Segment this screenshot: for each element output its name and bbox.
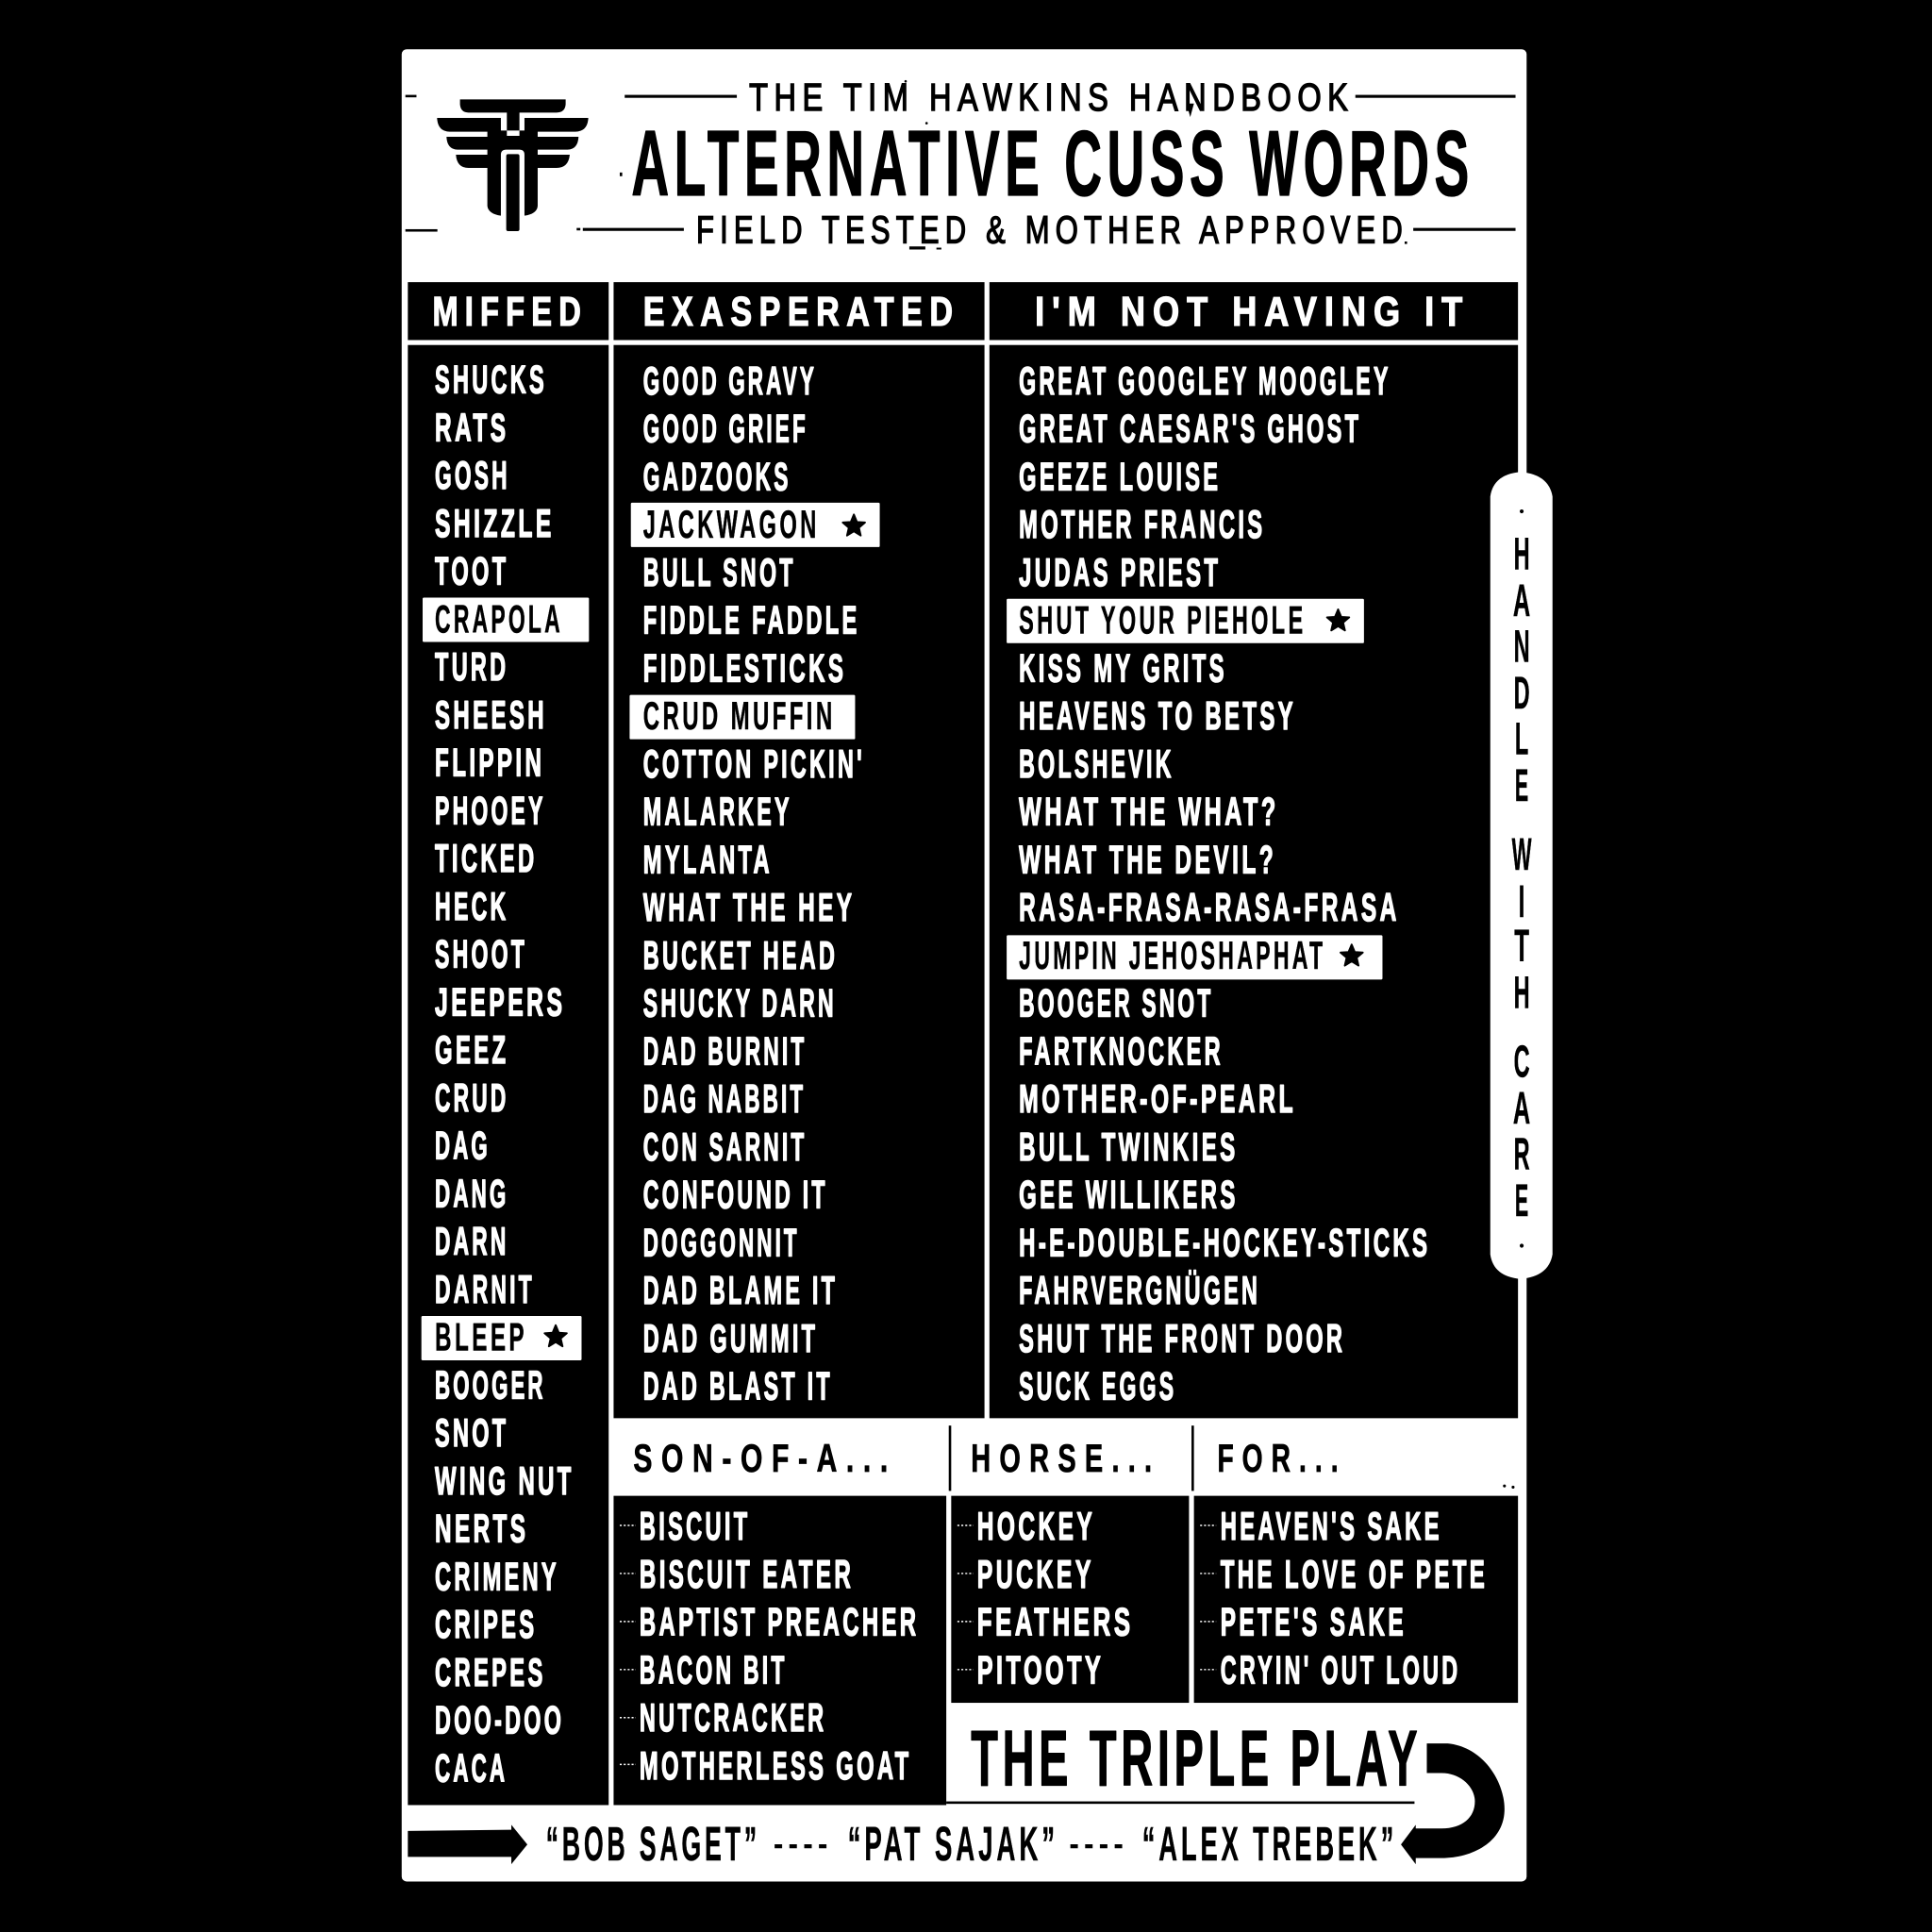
vertical stacked lettering: L bbox=[1515, 713, 1528, 764]
not having it words: BOOGER SNOT bbox=[1019, 981, 1214, 1025]
sub-headers row bbox=[633, 1425, 1347, 1491]
miffed words: SHOOT bbox=[435, 932, 527, 976]
divider between son-of-a and horse bbox=[949, 1425, 951, 1491]
vertical stacked lettering: I bbox=[1519, 876, 1524, 927]
triple play names bbox=[546, 1817, 1397, 1871]
miffed words: CRUD bbox=[435, 1075, 508, 1120]
not having it words: SHUT THE FRONT DOOR bbox=[1019, 1316, 1345, 1360]
horse words: HOCKEY bbox=[977, 1504, 1095, 1548]
exasperated words: DAD BLAME IT bbox=[643, 1268, 838, 1312]
not having it words: GREAT CAESAR'S GHOST bbox=[1019, 407, 1361, 451]
not having it words: GREAT GOOGLEY MOOGLEY bbox=[1019, 358, 1391, 403]
miffed words: SHEESH bbox=[435, 692, 547, 737]
top rule left bbox=[625, 95, 737, 98]
column headers bbox=[408, 282, 1518, 340]
sub-header: for: FOR... bbox=[1217, 1436, 1347, 1480]
highlight: shut your piehole with star bbox=[1007, 598, 1364, 643]
panel: for endings bbox=[1194, 1496, 1518, 1703]
highlight: crapola bbox=[423, 596, 589, 641]
white handbook card bbox=[402, 49, 1526, 1881]
horse words: FEATHERS bbox=[977, 1600, 1134, 1644]
exasperated words: GOOD GRAVY bbox=[643, 358, 817, 403]
name: Pat Sajak: “PAT SAJAK” bbox=[848, 1817, 1058, 1871]
horse words: PITOOTY bbox=[977, 1648, 1104, 1692]
exasperated words: FIDDLESTICKS bbox=[643, 645, 846, 690]
miffed words: SNOT bbox=[435, 1410, 508, 1455]
sub-header: son-of-a: SON-OF-A... bbox=[633, 1436, 897, 1480]
sub-header: horse: HORSE... bbox=[971, 1436, 1160, 1480]
miffed words: CRIPES bbox=[435, 1602, 537, 1646]
horse words bbox=[977, 1504, 1134, 1692]
vertical stacked lettering: A bbox=[1513, 575, 1530, 626]
son-of-a words: BAPTIST PREACHER bbox=[640, 1600, 919, 1644]
dotted leaders bbox=[958, 1525, 974, 1670]
dotted leaders bbox=[1200, 1525, 1216, 1670]
miffed words: CREPES bbox=[435, 1650, 546, 1694]
not having it words: RASA-FRASA-RASA-FRASA bbox=[1019, 885, 1400, 929]
vertical stacked lettering: H bbox=[1514, 528, 1530, 579]
vertical stacked lettering: N bbox=[1514, 621, 1530, 672]
for words bbox=[1221, 1504, 1488, 1692]
miffed words: TOOT bbox=[435, 548, 508, 592]
panel: I'm not having it list bbox=[990, 345, 1518, 1418]
exasperated words: BUCKET HEAD bbox=[643, 933, 838, 977]
miffed words: DARN bbox=[435, 1219, 508, 1263]
separator dashes: ---- bbox=[1070, 1828, 1128, 1861]
miffed words: TURD bbox=[435, 644, 508, 689]
panel: exasperated list bbox=[613, 345, 985, 1418]
miffed words: NERTS bbox=[435, 1507, 528, 1551]
panel: miffed list bbox=[408, 345, 608, 1805]
arrow: curved hook from triple play bbox=[1401, 1743, 1505, 1864]
header: exasperated bbox=[613, 282, 985, 340]
exasperated words: DAG NABBIT bbox=[643, 1076, 806, 1121]
not having it words: WHAT THE DEVIL? bbox=[1019, 837, 1276, 881]
not having it words bbox=[1019, 358, 1430, 1408]
miffed words: JEEPERS bbox=[435, 979, 566, 1024]
miffed words: CACA bbox=[435, 1745, 508, 1790]
dotted leaders bbox=[620, 1525, 636, 1764]
miffed words: DARNIT bbox=[435, 1267, 535, 1311]
son-of-a words: BISCUIT EATER bbox=[640, 1552, 854, 1596]
son-of-a words: BACON BIT bbox=[640, 1648, 788, 1692]
subtitle rule right bbox=[1413, 228, 1516, 231]
miffed words: RATS bbox=[435, 405, 508, 449]
header: I'm not having it: I'M NOT HAVING IT bbox=[1035, 290, 1470, 335]
vertical stacked lettering: D bbox=[1514, 668, 1530, 719]
highlight: jumpin jehoshaphat with star: JUMPIN JEHOSHAPHAT bbox=[1019, 933, 1325, 977]
miffed words: BOOGER bbox=[435, 1362, 546, 1407]
horse words: PUCKEY bbox=[977, 1552, 1094, 1596]
miffed words: DAG bbox=[435, 1124, 491, 1168]
vertical stacked lettering: C bbox=[1514, 1037, 1530, 1088]
rule under triple play bbox=[946, 1802, 1414, 1804]
not having it words: JUDAS PRIEST bbox=[1019, 550, 1221, 594]
miffed words: SHIZZLE bbox=[435, 501, 555, 545]
highlight: jumpin jehoshaphat with star bbox=[1007, 933, 1382, 979]
header: exasperated: EXASPERATED bbox=[643, 290, 959, 335]
not having it words: BULL TWINKIES bbox=[1019, 1124, 1239, 1169]
separator dashes: ---- bbox=[774, 1828, 833, 1861]
miffed words: WING NUT bbox=[435, 1458, 575, 1503]
son-of-a words bbox=[640, 1504, 919, 1788]
vertical stacked lettering: E bbox=[1515, 760, 1528, 811]
son-of-a words: MOTHERLESS GOAT bbox=[640, 1743, 912, 1788]
miffed words: PHOOEY bbox=[435, 788, 546, 832]
vertical stacked lettering bbox=[1512, 528, 1532, 1226]
for words: HEAVEN'S SAKE bbox=[1221, 1504, 1442, 1548]
highlight: jackwagon with star: JACKWAGON bbox=[643, 502, 820, 546]
not having it words: KISS MY GRITS bbox=[1019, 645, 1227, 690]
panel: horse endings bbox=[951, 1496, 1189, 1703]
exasperated words bbox=[643, 358, 865, 1408]
divider between horse and for bbox=[1191, 1425, 1194, 1491]
not having it words: H-E-DOUBLE-HOCKEY-STICKS bbox=[1019, 1220, 1430, 1264]
miffed words: TICKED bbox=[435, 836, 537, 880]
name: Bob Saget: “BOB SAGET” bbox=[546, 1817, 760, 1871]
not having it words: WHAT THE WHAT? bbox=[1019, 790, 1279, 834]
not having it words: SUCK EGGS bbox=[1019, 1364, 1176, 1408]
exasperated words: GADZOOKS bbox=[643, 454, 791, 498]
top rule right bbox=[1356, 95, 1516, 98]
top and bottom dots of the tab bbox=[1520, 509, 1524, 1248]
highlight: bleep with star: BLEEP bbox=[435, 1315, 527, 1359]
header: miffed: MIFFED bbox=[432, 290, 588, 335]
exasperated words: DOGGONNIT bbox=[643, 1220, 800, 1264]
side tab: handle with care bbox=[1491, 472, 1553, 1279]
not having it words: HEAVENS TO BETSY bbox=[1019, 693, 1296, 738]
for words: CRYIN' OUT LOUD bbox=[1221, 1648, 1460, 1692]
exasperated words: MALARKEY bbox=[643, 790, 792, 834]
exasperated words: GOOD GRIEF bbox=[643, 407, 808, 451]
masthead bbox=[406, 75, 1516, 1489]
vertical stacked lettering: E bbox=[1515, 1175, 1528, 1226]
not having it words: MOTHER FRANCIS bbox=[1019, 502, 1265, 546]
logo: Tim Hawkins winged TH mark bbox=[437, 99, 589, 231]
header: I'm not having it bbox=[990, 282, 1518, 340]
grunge specks bbox=[406, 80, 1514, 1489]
highlight: crud muffin: CRUD MUFFIN bbox=[643, 693, 836, 738]
miffed words: HECK bbox=[435, 884, 508, 928]
not having it words: BOLSHEVIK bbox=[1019, 741, 1174, 786]
exasperated words: SHUCKY DARN bbox=[643, 981, 837, 1025]
subtitle: field tested and mother approved: FIELD TESTED & MOTHER APPROVED bbox=[696, 208, 1408, 251]
highlight: crapola: CRAPOLA bbox=[435, 596, 563, 641]
not having it words: FAHRVERGNÜGEN bbox=[1019, 1268, 1260, 1312]
for words: THE LOVE OF PETE bbox=[1221, 1552, 1488, 1596]
exasperated words: WHAT THE HEY bbox=[643, 885, 855, 929]
exasperated words: DAD BURNIT bbox=[643, 1028, 808, 1073]
subtitle rule left bbox=[583, 228, 684, 231]
side tab: handle with care: W bbox=[1512, 829, 1532, 880]
miffed words: SHUCKS bbox=[435, 358, 547, 402]
highlight: crud muffin bbox=[629, 693, 855, 740]
vertical stacked lettering: T bbox=[1514, 921, 1529, 972]
not having it words: MOTHER-OF-PEARL bbox=[1019, 1076, 1296, 1121]
miffed words: CRIMENY bbox=[435, 1554, 559, 1598]
miffed words: DOO-DOO bbox=[435, 1698, 564, 1742]
vertical stacked lettering: H bbox=[1514, 967, 1530, 1018]
triple play heading: THE TRIPLE PLAY bbox=[971, 1714, 1422, 1803]
miffed words: DANG bbox=[435, 1171, 508, 1215]
miffed words: FLIPPIN bbox=[435, 741, 544, 785]
exasperated words: CONFOUND IT bbox=[643, 1173, 828, 1217]
arrow: right-pointing from left edge bbox=[408, 1824, 527, 1864]
not having it words: GEEZE LOUISE bbox=[1019, 454, 1221, 498]
kicker: the Tim Hawkins handbook: THE TIM HAWKINS HANDBOOK bbox=[749, 75, 1354, 119]
son-of-a words: BISCUIT bbox=[640, 1504, 750, 1548]
vertical stacked lettering: A bbox=[1513, 1083, 1530, 1134]
not having it words: FARTKNOCKER bbox=[1019, 1028, 1224, 1073]
exasperated words: MYLANTA bbox=[643, 837, 773, 881]
son-of-a words: NUTCRACKER bbox=[640, 1695, 826, 1740]
exasperated words: BULL SNOT bbox=[643, 550, 796, 594]
miffed words: GEEZ bbox=[435, 1027, 508, 1072]
not having it words: GEE WILLIKERS bbox=[1019, 1173, 1239, 1217]
panel: son-of-a endings bbox=[613, 1496, 946, 1805]
vertical stacked lettering: R bbox=[1514, 1129, 1530, 1180]
exasperated words: DAD GUMMIT bbox=[643, 1316, 818, 1360]
for words: PETE'S SAKE bbox=[1221, 1600, 1407, 1644]
exasperated words: CON SARNIT bbox=[643, 1124, 808, 1169]
miffed words: GOSH bbox=[435, 453, 510, 497]
miffed words bbox=[435, 358, 575, 1790]
name: Alex Trebek: “ALEX TREBEK” bbox=[1142, 1817, 1397, 1871]
exasperated words: DAD BLAST IT bbox=[643, 1364, 833, 1408]
highlight: shut your piehole with star: SHUT YOUR PIEHOLE bbox=[1019, 598, 1306, 642]
header: miffed bbox=[408, 282, 608, 340]
exasperated words: COTTON PICKIN' bbox=[643, 741, 865, 786]
exasperated words: FIDDLE FADDLE bbox=[643, 598, 860, 642]
